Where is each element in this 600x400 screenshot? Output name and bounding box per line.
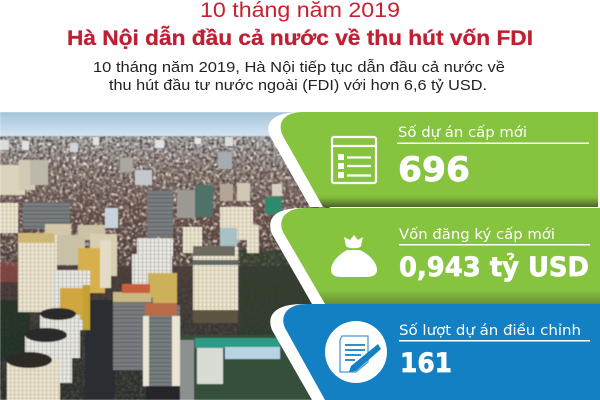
label: Số lượt dự án điều chỉnh bbox=[399, 322, 581, 339]
label: Vốn đăng ký cấp mới bbox=[399, 226, 555, 243]
far towers bbox=[0, 165, 25, 195]
value: 161: 161 bbox=[400, 348, 452, 379]
value: 0,943 tỷ USD: 0,943 tỷ USD bbox=[399, 252, 589, 283]
front towers bbox=[113, 298, 153, 370]
card: Vốn đăng ký cấp mới bbox=[270, 208, 600, 304]
intro text bbox=[93, 59, 505, 94]
icon: document and pencil bbox=[325, 321, 387, 383]
heading: Hà Nội dẫn đầu cả nước về thu hút vốn FDI: Hà Nội dẫn đầu cả nước về thu hút vốn FDI bbox=[67, 26, 533, 50]
card: Số dự án cấp mới bbox=[268, 112, 600, 207]
card: Số lượt dự án điều chỉnh bbox=[270, 304, 600, 400]
icon: money bag bbox=[331, 235, 377, 277]
value: 696: 696 bbox=[398, 150, 470, 190]
intro text: 10 tháng năm 2019, Hà Nội tiếp tục dẫn đầu cả nước về bbox=[93, 59, 505, 76]
intro text: thu hút đầu tư nước ngoài (FDI) với hơn 6,6 tỷ USD. bbox=[109, 77, 487, 94]
icon: list bbox=[332, 137, 376, 183]
photo: Hanoi aerial cityscape bbox=[0, 112, 330, 400]
label: Số dự án cấp mới bbox=[398, 124, 527, 141]
mid towers bbox=[78, 248, 105, 293]
